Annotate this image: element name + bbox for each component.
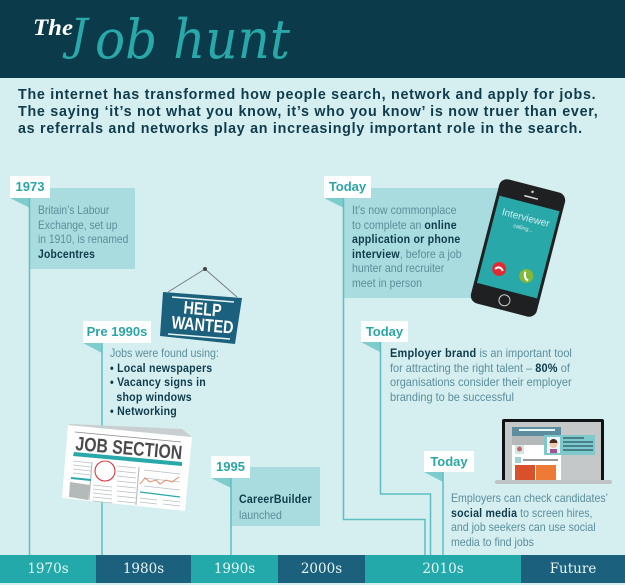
event: pre 1990s: [83, 321, 219, 418]
icon: smartphone: calling...: [512, 223, 534, 234]
icon: help wanted sign: [160, 267, 242, 344]
event: 1995: [211, 456, 312, 522]
event: today online interview: to complete an online: [352, 219, 457, 232]
event: 1995: CareerBuilder: [239, 493, 312, 506]
title: J: [62, 10, 90, 61]
decade timeline bar: 1980s: [123, 561, 164, 577]
event: today social media: media to find jobs: [451, 536, 534, 549]
event: today social media: social media to screen hires,: [451, 507, 592, 520]
decade timeline bar: 2000s: [301, 561, 342, 577]
event: today employer brand: [361, 321, 572, 404]
event: pre 1990s: • Local newspapers: [110, 362, 212, 375]
decade timeline bar: 1990s: [214, 561, 255, 577]
event: today online interview: interview, before a job: [352, 248, 462, 261]
event: 1973: Exchange, set up: [38, 219, 117, 232]
event: pre 1990s: Pre 1990s: [87, 324, 147, 339]
header band: [0, 0, 625, 78]
event: today online interview: meet in person: [352, 277, 422, 290]
event: today online interview: application or phone: [352, 233, 461, 246]
event: 1973: Britain’s Labour: [38, 204, 109, 217]
icon: job section newspaper: [62, 424, 192, 511]
event: today employer brand: Today: [366, 324, 403, 339]
event: pre 1990s: Jobs were found using:: [110, 347, 219, 360]
icon: smartphone: [470, 179, 566, 317]
event: today online interview: Today: [329, 179, 366, 194]
event: pre 1990s: • Vacancy signs in: [110, 376, 206, 389]
event: 1973: in 1910, is renamed: [38, 233, 128, 246]
event: 1973: 1973: [16, 179, 44, 194]
event: today employer brand: for attracting the right talent – 80% of: [390, 362, 570, 375]
decade timeline bar: Future: [550, 561, 596, 577]
event: today social media: and job seekers can use social: [451, 521, 596, 534]
event: today social media: Today: [430, 454, 468, 469]
event: 1973: [10, 176, 128, 261]
event: today online interview: [324, 176, 462, 290]
title: ob hunt: [95, 8, 290, 71]
icon: help wanted sign: HELP: [183, 297, 222, 321]
intro text: The saying ‘it’s not what you know, it’s who you know’ is now truer than ever,: [18, 104, 598, 120]
event: today online interview: It’s now commonplace: [352, 204, 456, 217]
intro text: The internet has transformed how people search, network and apply for jobs.: [18, 87, 596, 103]
event: 1973: Jobcentres: [38, 248, 95, 261]
icon: laptop with social profile: [495, 419, 612, 484]
icon: smartphone: Interviewer: [501, 207, 551, 230]
event: pre 1990s: • Networking: [110, 405, 177, 418]
event: today employer brand: Employer brand is an important tool: [390, 347, 572, 360]
event: today social media: Employers can check candidates’: [451, 492, 608, 505]
event: pre 1990s: shop windows: [116, 391, 192, 404]
icon: help wanted sign: WANTED: [171, 312, 234, 338]
decade timeline bar: 2010s: [422, 561, 464, 577]
decade timeline bar: 1970s: [27, 561, 69, 577]
intro text: [18, 87, 598, 137]
event: today social media: [424, 451, 608, 549]
event: today employer brand: branding to be successful: [390, 391, 514, 404]
event: today employer brand: organisations consider their employer: [390, 376, 572, 389]
event: 1995: 1995: [216, 459, 245, 474]
decade timeline bar: [0, 555, 625, 583]
event: 1995: launched: [239, 508, 282, 522]
event: today online interview: hunter and recruiter: [352, 262, 444, 275]
title: The: [33, 15, 73, 40]
intro text: as referrals and networks play an increasingly important role in the search.: [18, 121, 583, 137]
